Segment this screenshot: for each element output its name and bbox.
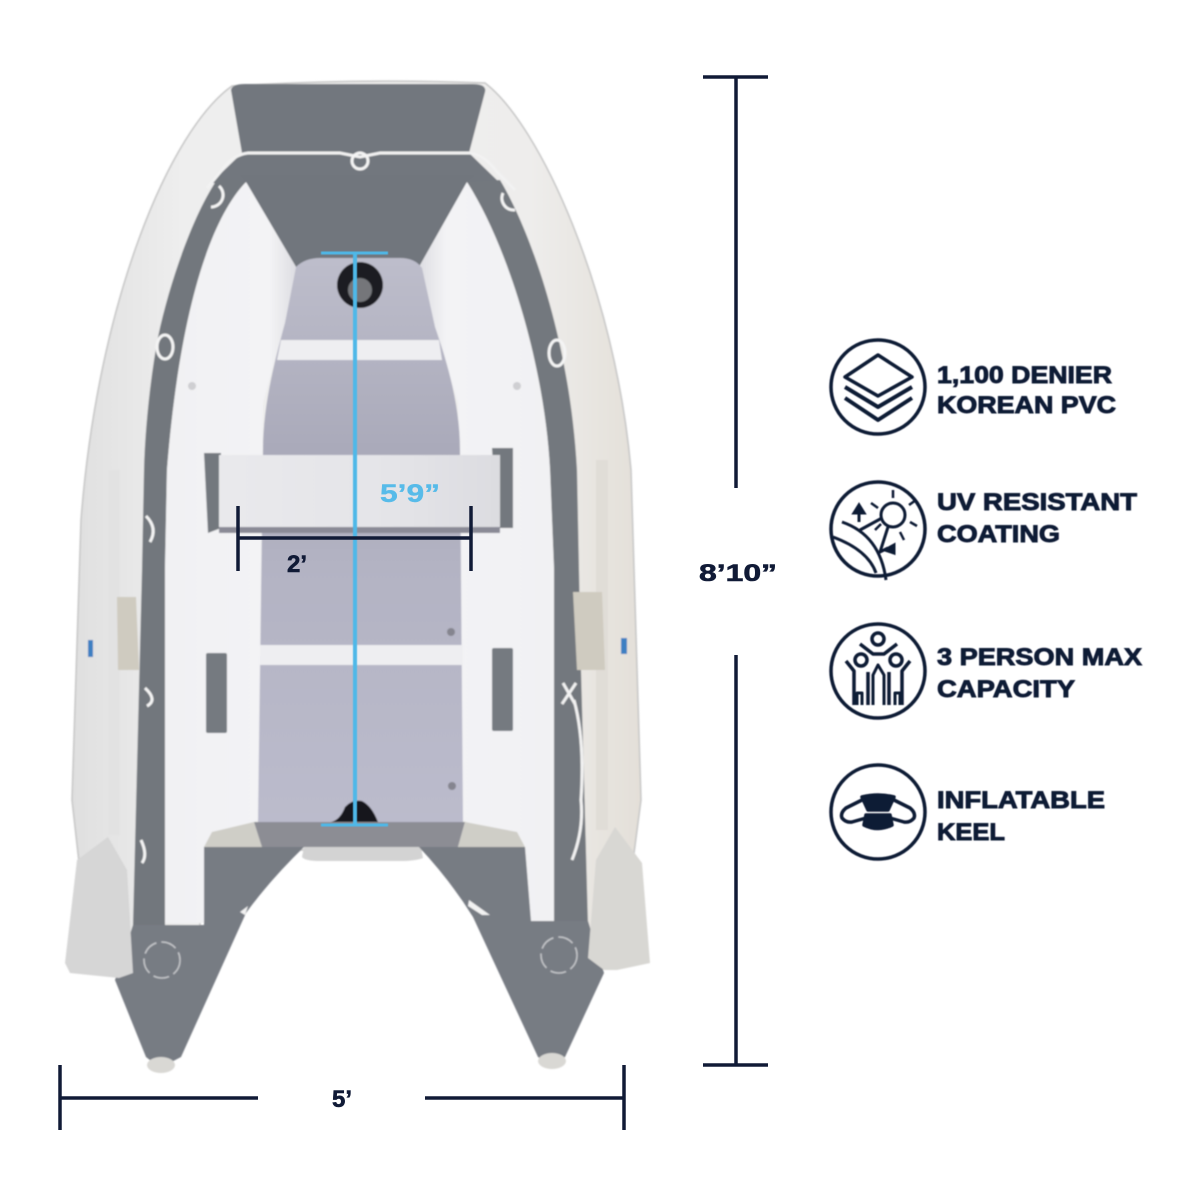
bow panel xyxy=(211,84,500,183)
label 5'9": 5’9” xyxy=(380,480,440,508)
porthole xyxy=(337,262,383,308)
text xyxy=(937,644,1142,703)
floor rivets xyxy=(188,382,521,790)
feature: capacity xyxy=(831,624,1142,718)
icon: fabric layers xyxy=(831,340,925,434)
feature: inflatable keel xyxy=(831,765,1105,859)
overall length dimension xyxy=(703,77,768,1065)
inflatable boat illustration xyxy=(65,81,650,1073)
left tail xyxy=(115,847,304,1068)
text: COATING xyxy=(937,521,1060,548)
seat ends xyxy=(204,448,513,533)
floor strips xyxy=(260,340,463,665)
stern mount xyxy=(331,801,378,822)
stern valves xyxy=(144,937,577,978)
seat xyxy=(219,455,500,527)
rope xyxy=(207,153,515,190)
d-rings xyxy=(141,153,565,863)
beam dimension 2' xyxy=(238,506,471,571)
icon: three people xyxy=(831,624,925,718)
outer hull xyxy=(72,81,641,960)
text: CAPACITY xyxy=(937,676,1075,703)
text: UV RESISTANT xyxy=(937,489,1137,516)
feature: Korean PVC xyxy=(831,340,1116,434)
hull logos xyxy=(88,638,627,657)
text xyxy=(937,787,1105,846)
text: KEEL xyxy=(937,819,1005,846)
transom step xyxy=(302,847,423,861)
text xyxy=(937,362,1116,419)
grab handles xyxy=(206,648,513,733)
tail tips xyxy=(147,1053,566,1073)
label 5': 5’ xyxy=(332,1086,352,1113)
left oarlock xyxy=(117,597,139,670)
bow inner panel xyxy=(240,175,475,267)
icon: keel cross-section xyxy=(831,765,925,859)
label 2': 2’ xyxy=(287,551,307,578)
right tube xyxy=(419,182,554,923)
length line 5'9" xyxy=(321,253,388,825)
left oar blade xyxy=(65,837,133,978)
floor xyxy=(258,258,463,824)
icon: sun and surface xyxy=(831,482,925,580)
overall width dimension xyxy=(60,1065,624,1130)
tail slits xyxy=(240,900,490,915)
stern grey band xyxy=(254,822,465,847)
text: 3 PERSON MAX xyxy=(937,644,1142,671)
left tube xyxy=(165,182,296,923)
stern light pads xyxy=(204,822,525,847)
right oarlock xyxy=(573,592,605,670)
right grey band xyxy=(467,180,588,925)
text: 1,100 DENIER xyxy=(937,362,1112,389)
text: INFLATABLE xyxy=(937,787,1105,814)
feature: UV resistant xyxy=(831,482,1137,580)
right oar shaft xyxy=(596,460,608,830)
text: KOREAN PVC xyxy=(937,392,1116,419)
left grey band xyxy=(133,177,246,925)
right oar blade xyxy=(588,827,650,970)
left oar shaft xyxy=(108,470,120,835)
text xyxy=(937,489,1137,548)
label 8'10": 8’10” xyxy=(699,560,777,587)
right tail xyxy=(419,847,604,1066)
